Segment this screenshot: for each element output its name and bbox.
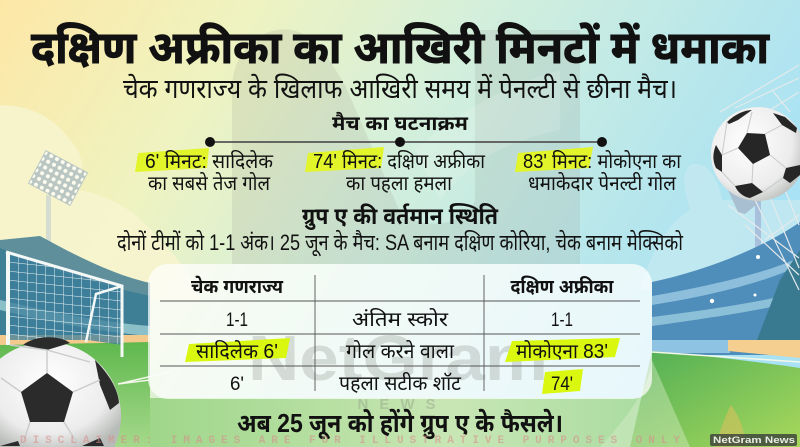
section heading: group A: ग्रुप ए की वर्तमान स्थिति — [302, 203, 499, 230]
row: goal scorer — [185, 338, 620, 363]
row: first accurate shot: 6' — [230, 374, 244, 395]
closing statement: अब 25 जून को होंगे ग्रुप ए के फैसले। — [237, 408, 563, 440]
timeline item: 6 minute: 6' मिनट: सादिलेक — [145, 149, 274, 173]
floodlight right — [728, 190, 762, 258]
timeline item: 6 minute — [135, 148, 274, 195]
comparison table — [160, 275, 640, 395]
timeline item: 83 minute: 83' मिनट: मोकोएना का — [523, 149, 682, 173]
watermark text: NetGram — [248, 322, 548, 394]
subtitle: चेक गणराज्य के खिलाफ आखिरी समय में पेनल्टी से छीना मैच। — [123, 73, 677, 104]
watermark logo — [232, 29, 580, 264]
timeline item: 83 minute — [515, 147, 682, 195]
timeline item: 74 minute: का पहला हमला — [346, 173, 453, 195]
row: goal scorer: मोकोएना 83' — [516, 339, 608, 363]
row: goal scorer: गोल करने वाला — [346, 339, 455, 363]
group A fixtures text: दोनों टीमों को 1-1 अंक। 25 जून के मैच: SA बनाम दक्षिण कोरिया, चेक बनाम मेक्सिको — [117, 229, 683, 257]
row: final score: 1-1 — [551, 310, 573, 331]
disclaimer: DISCLAIMER: IMAGES ARE FOR ILLUSTRATIVE PURPOSES ONLY — [20, 435, 680, 447]
row: final score: 1-1 — [226, 310, 248, 331]
goal post left — [6, 252, 122, 357]
goal net right — [720, 65, 799, 290]
floodlight left — [28, 150, 88, 245]
timeline item: 83 minute: धमाकेदार पेनल्टी गोल — [528, 171, 676, 195]
brand badge: NetGram News — [713, 435, 795, 446]
row: final score: अंतिम स्कोर — [352, 307, 449, 331]
timeline item: 74 minute: 74' मिनट: दक्षिण अफ्रीका — [313, 149, 486, 173]
row: final score — [226, 307, 573, 331]
section heading: match timeline: मैच का घटनाक्रम — [332, 111, 469, 135]
pitch grass — [0, 335, 800, 447]
football right — [711, 107, 800, 201]
stadium stands right — [652, 222, 800, 358]
row: first accurate shot: पहला सटीक शॉट — [339, 371, 462, 395]
table header: दक्षिण अफ्रीका — [510, 275, 614, 298]
title: दक्षिण अफ्रीका का आखिरी मिनटों में धमाका — [31, 22, 770, 73]
table header — [191, 275, 614, 298]
table panel background — [148, 264, 652, 399]
watermark text: NEWS — [358, 396, 446, 413]
row: first accurate shot: 74' — [551, 374, 573, 395]
clouds left — [0, 105, 200, 300]
timeline item: 74 minute — [305, 147, 486, 195]
football left — [0, 337, 121, 447]
table header: चेक गणराज्य — [191, 275, 284, 298]
timeline item: 6 minute: का सबसे तेज गोल — [148, 171, 270, 195]
timeline — [205, 137, 607, 147]
clouds right — [640, 164, 800, 290]
stadium stands left — [0, 236, 150, 350]
row: goal scorer: सादिलेक 6' — [196, 339, 278, 363]
row: first accurate shot — [230, 369, 583, 395]
